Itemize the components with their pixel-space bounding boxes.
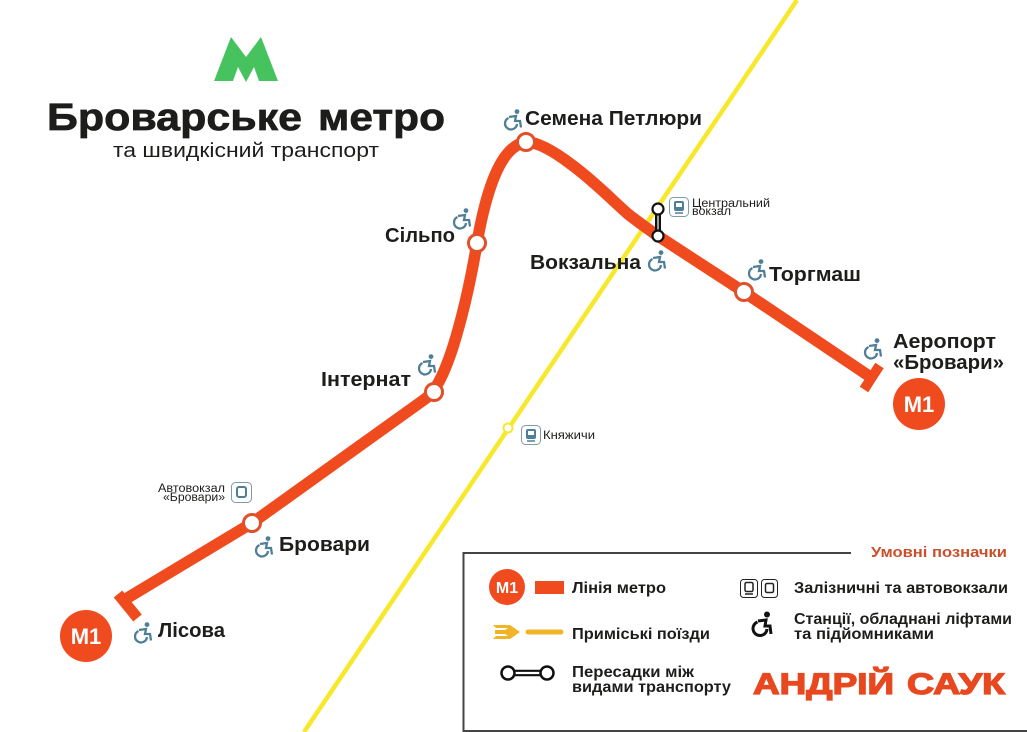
label: Автовокзал Бровари: Автовокзал <box>158 483 225 495</box>
station label: Сільпо <box>385 208 470 247</box>
line badge: M1 left <box>60 610 112 662</box>
legend: suburban trains: Приміські поїзди <box>572 626 710 643</box>
title: Броварське <box>47 97 302 139</box>
station label: Сільпо: Сільпо <box>385 225 455 247</box>
label: Автовокзал Бровари <box>158 482 252 504</box>
legend: accessible stations: Станції, обладнані ліфтами <box>794 611 1012 628</box>
legend: metro line: Лінія метро <box>572 580 666 597</box>
station label: Аеропорт Бровари <box>865 331 1004 374</box>
label: Центральний вокзал: Центральний <box>692 198 770 210</box>
legend heading: Умовні позначки <box>871 544 1007 561</box>
icon: wheelchair <box>505 109 521 129</box>
label: Автовокзал Бровари: «Бровари» <box>163 492 225 504</box>
author name <box>753 667 1006 701</box>
label: Княжичи: Княжичи <box>543 430 595 442</box>
station marker: Княжичи <box>504 424 512 432</box>
station label: Вокзальна: Вокзальна <box>530 252 642 274</box>
icon: train <box>522 426 540 444</box>
legend: metro line <box>489 569 666 605</box>
legend: transfers <box>502 664 731 696</box>
terminus bar: Аеропорт <box>864 366 880 390</box>
station label: Аеропорт Бровари: «Бровари» <box>893 352 1004 374</box>
legend: accessible stations <box>753 611 1012 643</box>
line badge: M1 right <box>893 378 945 430</box>
station marker: Семена Петлюри <box>518 134 534 150</box>
station marker: Бровари <box>244 514 260 532</box>
suburban train line <box>304 0 797 732</box>
icon: wheelchair <box>454 208 470 228</box>
author name: САУК <box>907 668 1006 701</box>
station label: Інтернат: Інтернат <box>321 369 411 391</box>
legend: transfers: видами транспорту <box>572 679 731 696</box>
title <box>47 97 445 139</box>
station label: Лісова: Лісова <box>158 620 226 642</box>
label: Центральний вокзал <box>670 198 770 218</box>
icon: wheelchair <box>256 536 272 556</box>
label: Центральний вокзал: вокзал <box>692 206 731 218</box>
station marker: Сільпо <box>468 234 486 252</box>
legend: rail and bus stations: Залізничні та автовокзали <box>794 580 1008 597</box>
icon: train <box>670 198 688 216</box>
logo: green metro M <box>214 37 278 82</box>
station marker: Торгмаш <box>736 284 752 300</box>
author name: АНДРІЙ <box>753 667 894 701</box>
icon: bus <box>232 482 252 502</box>
legend: transfers: Пересадки між <box>572 664 695 681</box>
station label: Торгмаш: Торгмаш <box>769 264 861 286</box>
line badge: M1 left: M1 <box>71 624 101 649</box>
line badge: M1 right: M1 <box>904 392 934 417</box>
legend: suburban trains <box>493 625 710 643</box>
station label: Торгмаш <box>749 259 861 286</box>
icon: wheelchair <box>135 622 151 642</box>
panel: legend <box>464 544 1027 731</box>
metro line M1 <box>118 142 880 618</box>
title: метро <box>318 97 445 139</box>
terminus bar: Лісова <box>118 594 138 618</box>
subtitle: та швидкісний транспорт <box>113 140 379 162</box>
station label: Семена Петлюри: Семена Петлюри <box>525 108 702 130</box>
transfer connector: Вокзальна to Центральний вокзал <box>652 204 664 242</box>
station label: Бровари: Бровари <box>279 534 370 556</box>
icon: wheelchair <box>865 338 881 358</box>
icon: wheelchair <box>749 259 765 279</box>
icon: wheelchair <box>649 250 665 270</box>
legend: metro line: M1 <box>496 580 518 597</box>
icon: wheelchair <box>419 354 435 374</box>
station label: Аеропорт Бровари: Аеропорт <box>893 331 996 353</box>
station marker: Інтернат <box>426 384 442 400</box>
legend: accessible stations: та підйомниками <box>794 626 934 643</box>
station label: Інтернат <box>321 354 435 391</box>
label: Княжичи <box>522 426 595 444</box>
